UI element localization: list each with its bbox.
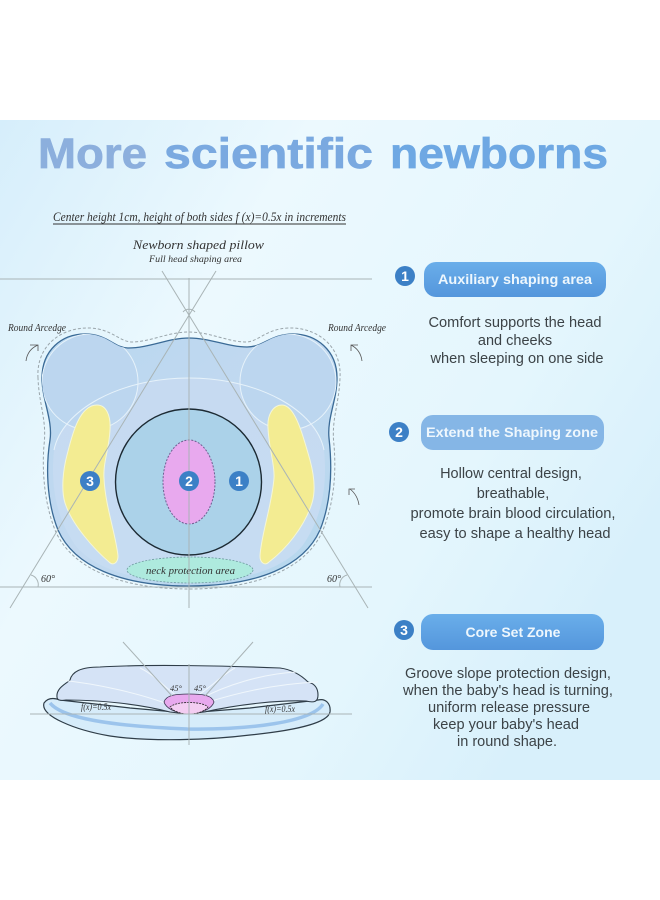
- description 3: when the baby's head is turning,: [402, 683, 613, 699]
- description 1: and cheeks: [478, 333, 552, 349]
- diagram heading: [132, 237, 264, 265]
- pill heading 2: [421, 415, 604, 450]
- curved arrows: [26, 345, 362, 505]
- round arc edge labels: Round Arcedge: [327, 323, 386, 334]
- angle labels: 60°: [327, 574, 341, 585]
- side view labels: 45°: [170, 683, 182, 693]
- neck protection area: neck protection area: [146, 566, 235, 577]
- top caption: Center height 1cm, height of both sides f (x)=0.5x in increments: [53, 209, 346, 224]
- title: newborns: [390, 130, 608, 178]
- neck protection area: [127, 557, 253, 583]
- pill heading 2: Extend the Shaping zone: [426, 424, 598, 440]
- badge 2: 2: [185, 473, 193, 489]
- ear circles: [42, 334, 336, 430]
- badge 1: [229, 471, 249, 491]
- description 1: [428, 315, 604, 367]
- description 2: breathable,: [477, 486, 549, 502]
- description 2: [410, 466, 616, 542]
- section 3: [394, 614, 613, 750]
- number badge 3: 3: [400, 622, 408, 638]
- pillow body: [42, 334, 337, 586]
- background panel: [0, 120, 660, 780]
- side view labels: 45°: [194, 683, 206, 693]
- badge 3: [80, 471, 100, 491]
- pill heading 1: Auxiliary shaping area: [438, 271, 592, 287]
- description 2: promote brain blood circulation,: [410, 506, 616, 522]
- pink centre ellipse: [163, 440, 215, 524]
- description 3: [402, 666, 613, 750]
- number badge 2: [389, 422, 409, 442]
- upper cushion: [57, 665, 318, 714]
- title: scientific: [164, 130, 373, 178]
- title: [38, 130, 608, 178]
- white contour lines: [60, 668, 318, 703]
- badge 1: 1: [235, 473, 243, 489]
- base: [44, 699, 330, 740]
- pill heading 3: [421, 614, 604, 650]
- side view labels: f(x)=0.5x: [265, 704, 296, 715]
- description 1: Comfort supports the head: [428, 315, 602, 331]
- number badge 3: [394, 620, 414, 640]
- base blue band: [50, 703, 323, 729]
- inner zone contour: [54, 378, 324, 450]
- description 3: uniform release pressure: [428, 700, 590, 716]
- dashed outer contour: [38, 328, 340, 589]
- construction lines: [0, 271, 372, 608]
- round arc edge labels: [7, 323, 386, 334]
- badge 3: 3: [86, 473, 94, 489]
- pink hollow: [164, 694, 214, 714]
- pill heading 3: Core Set Zone: [466, 624, 561, 640]
- yellow zone left: [63, 405, 118, 564]
- inner side zone: [53, 378, 325, 582]
- description 1: when sleeping on one side: [429, 351, 604, 367]
- angle labels: 60°: [41, 574, 55, 585]
- angle labels: [41, 574, 341, 585]
- round arc edge labels: Round Arcedge: [7, 323, 66, 334]
- pillow side view diagram: [30, 642, 352, 745]
- badge 2: [179, 471, 199, 491]
- number badge 1: 1: [401, 268, 409, 284]
- side view labels: [81, 683, 296, 715]
- pill heading 1: [424, 262, 606, 297]
- section 2: [389, 415, 616, 542]
- description 2: easy to shape a healthy head: [420, 526, 610, 542]
- diagram heading: Newborn shaped pillow: [132, 237, 264, 252]
- pillow top view diagram: [0, 271, 372, 608]
- description 3: keep your baby's head: [433, 717, 579, 733]
- number badge 1: [395, 266, 415, 286]
- description 3: in round shape.: [457, 734, 557, 750]
- side view construction lines: [30, 642, 352, 745]
- description 2: Hollow central design,: [440, 466, 582, 482]
- central hollow circle: [116, 409, 262, 555]
- side view labels: f(x)=0.5x: [81, 702, 112, 713]
- number badge 2: 2: [395, 424, 403, 440]
- title: More: [38, 130, 147, 178]
- section 1: [395, 262, 606, 367]
- diagram heading: Full head shaping area: [148, 255, 242, 265]
- description 3: Groove slope protection design,: [405, 666, 611, 682]
- yellow zone right: [260, 405, 314, 564]
